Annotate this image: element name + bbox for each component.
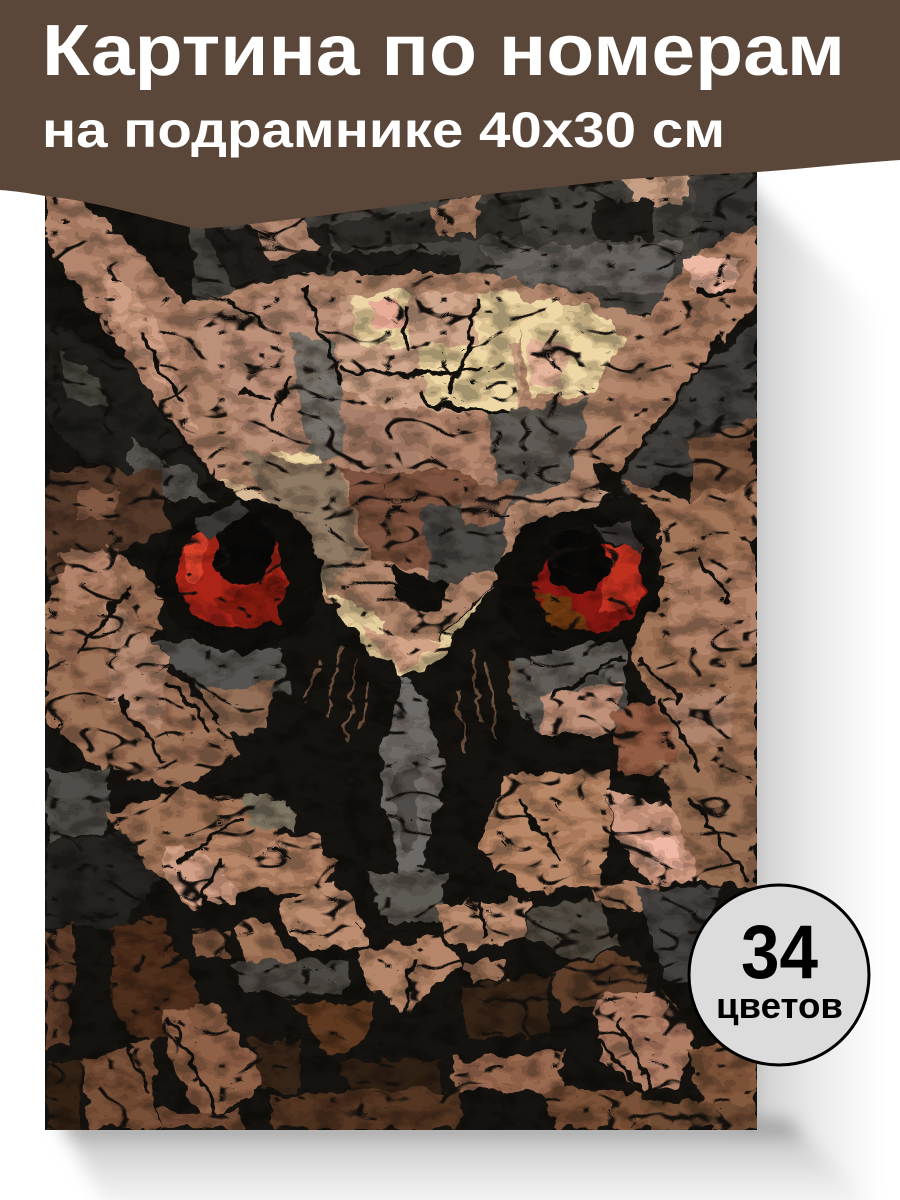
right ear — [570, 225, 757, 500]
left upper side feathers — [45, 470, 170, 580]
paint mottling — [45, 170, 757, 1130]
forehead — [184, 273, 660, 677]
right mid feathers — [550, 885, 757, 1115]
badge: 34 colours: цветов — [716, 985, 843, 1026]
bottom feathers left — [46, 915, 300, 1130]
under-eye right and right cheek — [505, 480, 757, 775]
lower right cheek — [478, 760, 757, 915]
left cheek — [45, 545, 290, 790]
bottom edge band — [160, 1090, 757, 1130]
left eye — [158, 497, 322, 653]
lower left cheek — [46, 770, 339, 930]
bark crack texture — [45, 170, 757, 1130]
subtitle: на подрамнике 40х30 см — [42, 102, 725, 158]
beak — [382, 677, 445, 888]
left ear — [45, 196, 240, 500]
header banner — [0, 0, 900, 229]
badge: 34 colours: 34 — [741, 910, 818, 995]
feather edge cracks — [60, 270, 750, 1110]
lower centre dark brown — [293, 975, 563, 1100]
title: Картина по номерам — [42, 11, 845, 91]
chest feathers — [190, 870, 620, 1015]
badge: 34 colours — [689, 885, 869, 1065]
right eye — [494, 508, 648, 634]
canvas shadow — [60, 176, 880, 1200]
painting: owl on bark — [45, 170, 757, 1130]
fringe strokes under eyes — [305, 650, 515, 750]
top bark band — [190, 170, 757, 320]
